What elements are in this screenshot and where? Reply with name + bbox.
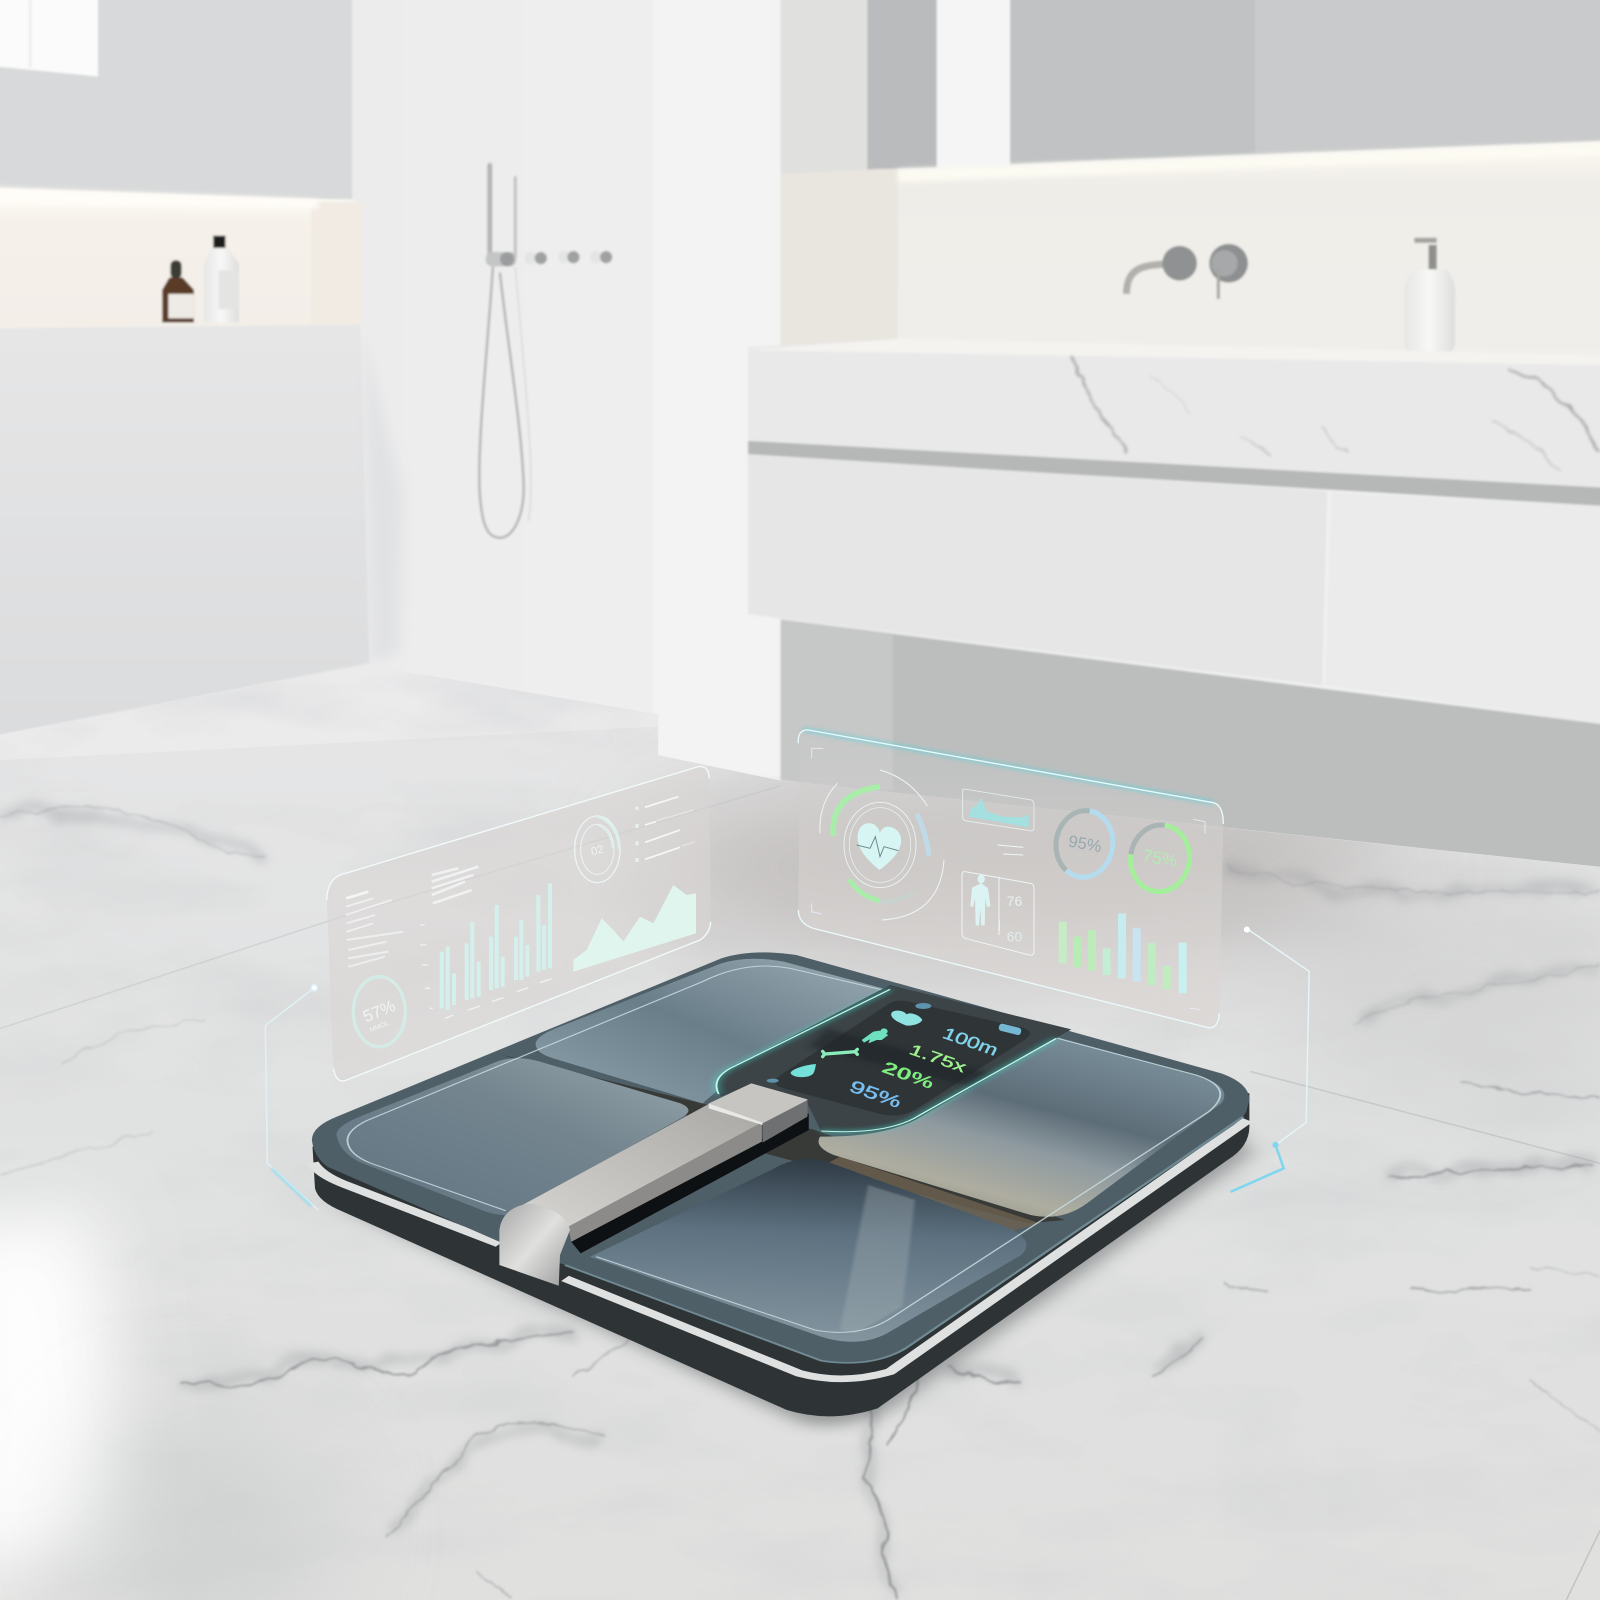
hologram panel: left xyxy=(327,766,711,1081)
left ledge xyxy=(0,324,369,736)
value: 02: 02 xyxy=(590,844,605,858)
silver handle strap xyxy=(499,1083,809,1286)
axis ticks xyxy=(420,925,552,1018)
glowing trim xyxy=(716,989,1056,1132)
value: 57%: 57% xyxy=(360,996,398,1026)
marble countertop xyxy=(748,339,1600,488)
icon: wall tap xyxy=(1127,244,1248,299)
gauge: 95% xyxy=(1052,807,1117,881)
value: 75%: 75% xyxy=(1141,845,1179,871)
bracket: right connector xyxy=(1231,927,1309,1192)
glass panel: right xyxy=(819,1037,1224,1217)
icon: body figure xyxy=(970,875,990,925)
marble veins xyxy=(0,808,1600,1600)
bar chart xyxy=(1059,913,1187,993)
counter shadow band xyxy=(748,441,1600,506)
icon: heart xyxy=(891,1011,922,1026)
floor light strip xyxy=(0,1214,128,1592)
value: 76: 76 xyxy=(1007,893,1022,909)
reading: 95%: 95% xyxy=(846,1078,905,1112)
value caption: MMOL xyxy=(369,1020,390,1034)
value: 95%: 95% xyxy=(1067,832,1103,856)
soft vein halo xyxy=(0,814,1600,1600)
icon: status top xyxy=(915,1003,931,1009)
scale shadow xyxy=(315,1127,1253,1426)
dark divider base xyxy=(502,1055,1065,1223)
right column and upper cabinet xyxy=(781,0,1600,347)
vanity recess xyxy=(781,619,1600,878)
silver edge band xyxy=(312,1120,1248,1379)
scale display readouts xyxy=(767,1003,1022,1112)
icon: heart with pulse xyxy=(858,823,901,870)
ring dial xyxy=(575,816,620,883)
area chart xyxy=(573,885,696,972)
reading: 20%: 20% xyxy=(879,1059,937,1093)
grouped bars xyxy=(440,883,552,1010)
glass panel: top xyxy=(536,959,889,1103)
marble floor xyxy=(0,653,1600,1600)
smart scale xyxy=(312,952,1253,1426)
screen xyxy=(775,1001,1030,1116)
glass top xyxy=(312,952,1249,1363)
scale base xyxy=(312,980,1249,1416)
icon: bone xyxy=(823,1049,857,1057)
tiny labels xyxy=(997,845,1023,855)
glass panel: bottom xyxy=(590,1159,1026,1342)
hologram panel: right xyxy=(798,729,1223,1028)
icon: white bottle xyxy=(204,236,239,322)
vanity drawers xyxy=(748,454,1600,724)
reading: 100m: 100m xyxy=(940,1023,1002,1059)
icon: amber bottle xyxy=(162,260,194,322)
clip xyxy=(709,1083,808,1123)
icon: battery xyxy=(998,1023,1022,1036)
icon: status left xyxy=(767,1079,779,1083)
legend list xyxy=(635,797,695,862)
lit back wall with tap and soap xyxy=(898,143,1600,359)
icon: soap dispenser xyxy=(1404,238,1455,352)
icon: drop xyxy=(791,1064,816,1077)
bracket: left connector xyxy=(265,985,318,1210)
display panel xyxy=(716,985,1071,1133)
glass panel: left xyxy=(336,1058,688,1215)
heart gauge xyxy=(820,770,944,920)
gauge: 75% xyxy=(1126,821,1194,895)
mini area chart xyxy=(963,789,1034,831)
body metrics card xyxy=(962,872,1034,955)
text block xyxy=(346,867,478,967)
icon: person xyxy=(862,1028,888,1043)
ring gauge: 57% xyxy=(353,977,405,1047)
light outline xyxy=(347,966,1220,1332)
tile joints xyxy=(0,786,1600,1600)
reading: 1.75x: 1.75x xyxy=(906,1041,970,1076)
value: 60: 60 xyxy=(1007,929,1022,945)
shower fittings xyxy=(479,165,612,538)
wall column xyxy=(653,0,781,776)
left niche with bottles xyxy=(0,0,362,329)
